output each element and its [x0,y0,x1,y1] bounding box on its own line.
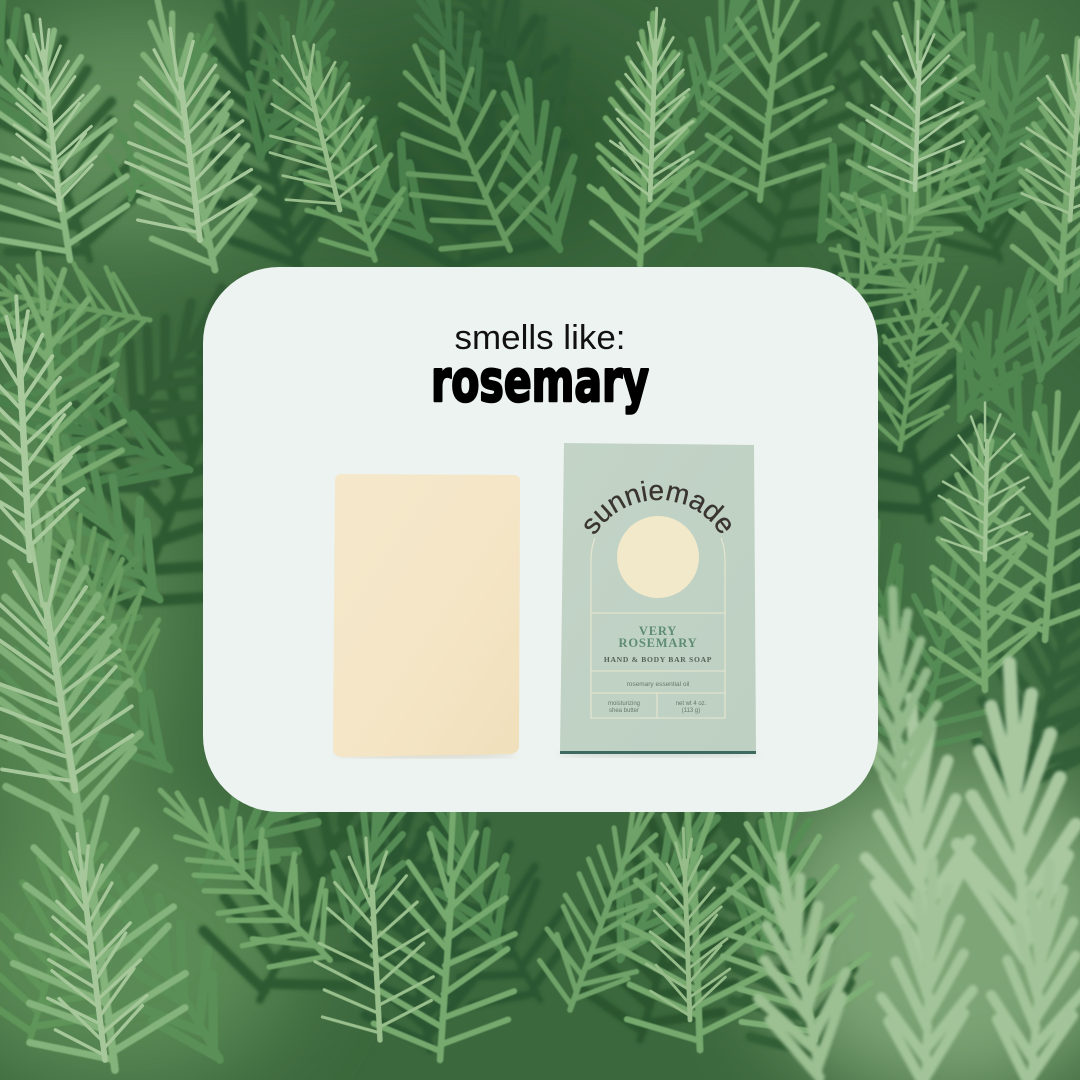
ingredient line: rosemary essential oil [627,681,690,688]
soap bar [333,474,520,758]
net weight: (113 g) [682,708,700,714]
panel: product card [203,267,878,812]
arch outline and info grid [591,538,725,718]
soap box packaging [560,443,756,758]
product type: HAND & BODY BAR SOAP [604,655,712,664]
soap window [617,516,699,598]
moisturizing note: moisturizing [608,701,640,707]
product name: VERY [639,624,677,638]
soap box packaging: ROSEMARY [619,636,697,650]
heading: smells like: smells like: [454,319,626,357]
pale blurred foreground sprigs, lower right [734,589,1080,1080]
heading: rosemary: rosemary [431,347,649,415]
moisturizing note: shea butter [609,708,639,714]
brand wordmark: sunniemade [584,480,731,534]
net weight: net wt 4 oz. [676,701,706,707]
